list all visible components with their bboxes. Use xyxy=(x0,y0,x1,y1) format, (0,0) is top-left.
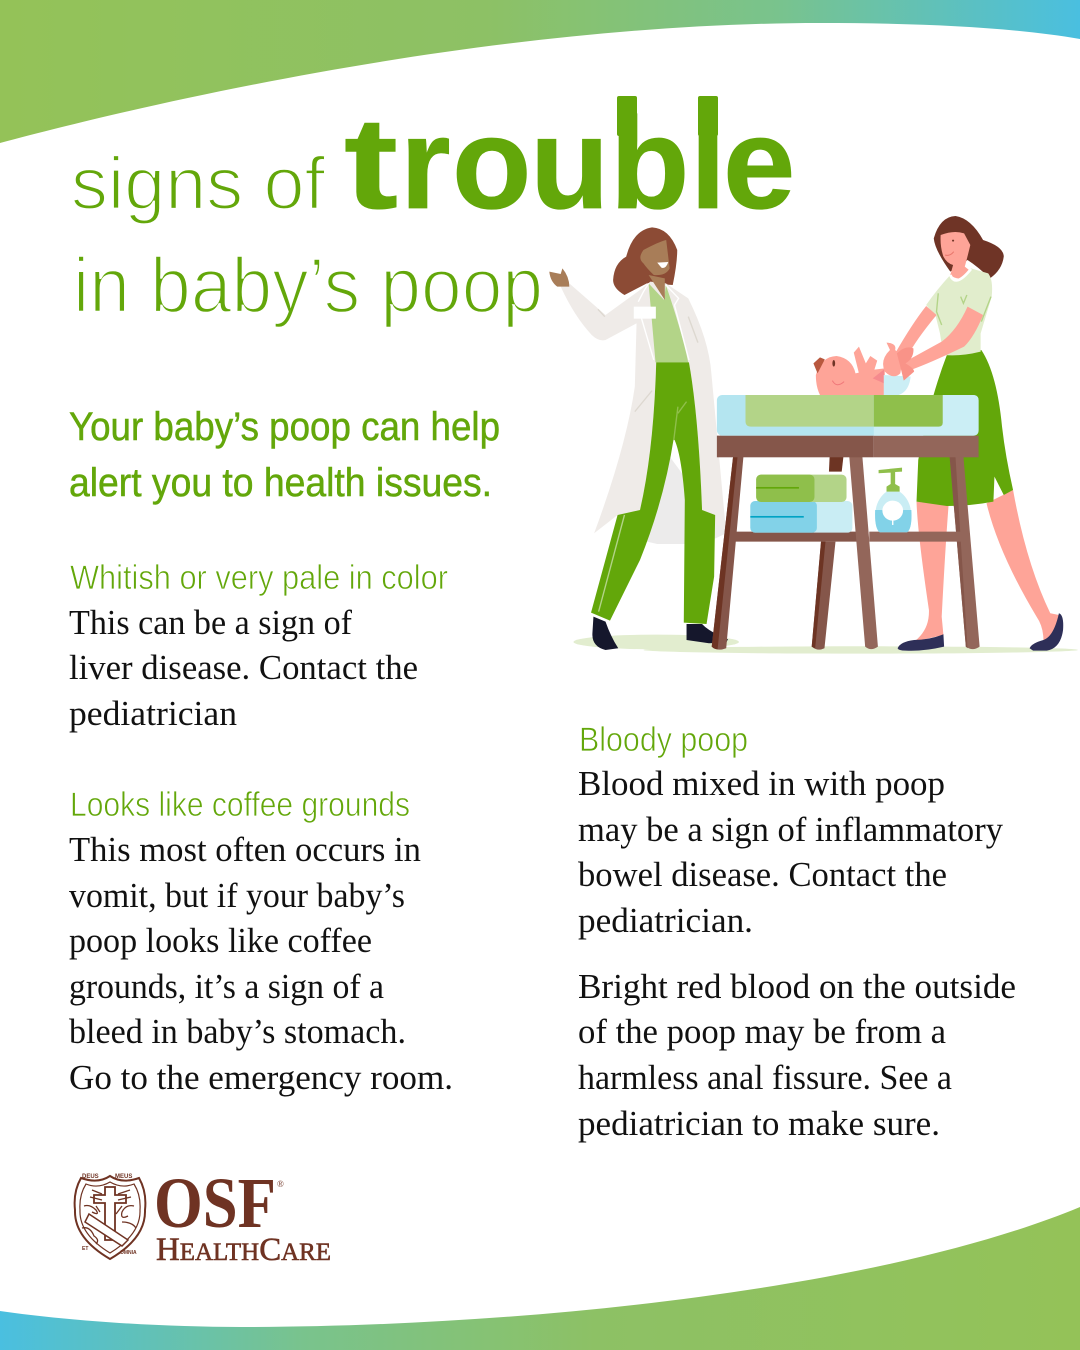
body text: bloody poop paragraph one: bowel disease. Contact the xyxy=(578,855,947,894)
title: in baby’s poop xyxy=(73,241,543,329)
logo wordmark: HEALTHCARE xyxy=(156,1232,331,1268)
logo wordmark: OSF xyxy=(154,1163,276,1243)
logo crest: OMNIA xyxy=(120,1250,137,1256)
body text: bloody poop paragraph two: harmless anal fissure. See a xyxy=(578,1058,952,1097)
title: rouble xyxy=(400,90,795,236)
heading: coffee grounds: Looks like coffee grounds xyxy=(70,786,410,824)
logo crest: DEUS xyxy=(82,1174,99,1180)
body text: bloody poop paragraph two: Bright red blood on the outside xyxy=(578,967,1016,1006)
section: whitish or very pale xyxy=(69,559,448,733)
illustration: doctor, mother and baby at changing table xyxy=(549,216,1078,654)
body text: whitish: liver disease. Contact the xyxy=(69,648,418,687)
section: bloody poop xyxy=(578,721,1016,1143)
towels xyxy=(750,475,852,533)
title: signs of xyxy=(71,142,325,225)
body text: bloody poop paragraph one xyxy=(578,764,1003,940)
subheading xyxy=(69,405,500,505)
bottom gradient wave xyxy=(0,1207,1080,1350)
logo crest: ET xyxy=(82,1246,88,1252)
body text: bloody poop paragraph two: pediatrician to make sure. xyxy=(578,1104,940,1143)
OSF HealthCare logo xyxy=(75,1163,331,1268)
logo wordmark xyxy=(154,1163,331,1268)
body text: coffee grounds: grounds, it’s a sign of a xyxy=(69,967,384,1006)
mother figure xyxy=(895,216,1063,651)
logo wordmark: ® xyxy=(277,1179,284,1189)
subheading: alert you to health issues. xyxy=(69,461,492,505)
changing table xyxy=(712,395,980,650)
body text: whitish xyxy=(69,603,418,733)
title: t xyxy=(344,90,398,236)
top gradient wave xyxy=(0,0,1080,143)
body text: bloody poop paragraph two: of the poop may be from a xyxy=(578,1012,946,1051)
heading: bloody poop: Bloody poop xyxy=(579,721,748,759)
body text: bloody poop paragraph one: pediatrician. xyxy=(578,901,753,940)
baby xyxy=(813,343,914,396)
body text: coffee grounds: This most often occurs in xyxy=(69,830,421,869)
logo crest: MEUS xyxy=(115,1174,132,1180)
doctor figure xyxy=(549,227,728,650)
body text: bloody poop paragraph two xyxy=(578,967,1016,1143)
body text: coffee grounds: poop looks like coffee xyxy=(69,921,372,960)
body text: coffee grounds: Go to the emergency room. xyxy=(69,1058,453,1097)
body text: bloody poop paragraph one: Blood mixed in with poop xyxy=(578,764,945,803)
logo crest xyxy=(75,1174,145,1259)
body text: whitish: This can be a sign of xyxy=(69,603,352,642)
section: coffee grounds xyxy=(69,786,453,1097)
body text: coffee grounds: vomit, but if your baby’s xyxy=(69,876,405,915)
ground shadow xyxy=(573,635,1078,654)
subheading: Your baby’s poop can help xyxy=(69,405,500,449)
body text: whitish: pediatrician xyxy=(69,694,237,733)
title xyxy=(71,90,795,329)
soap bottle xyxy=(875,468,912,532)
body text: coffee grounds: bleed in baby’s stomach. xyxy=(69,1012,406,1051)
body text: coffee grounds xyxy=(69,830,453,1097)
heading: whitish: Whitish or very pale in color xyxy=(70,559,448,597)
body text: bloody poop paragraph one: may be a sign of inflammatory xyxy=(578,810,1003,849)
